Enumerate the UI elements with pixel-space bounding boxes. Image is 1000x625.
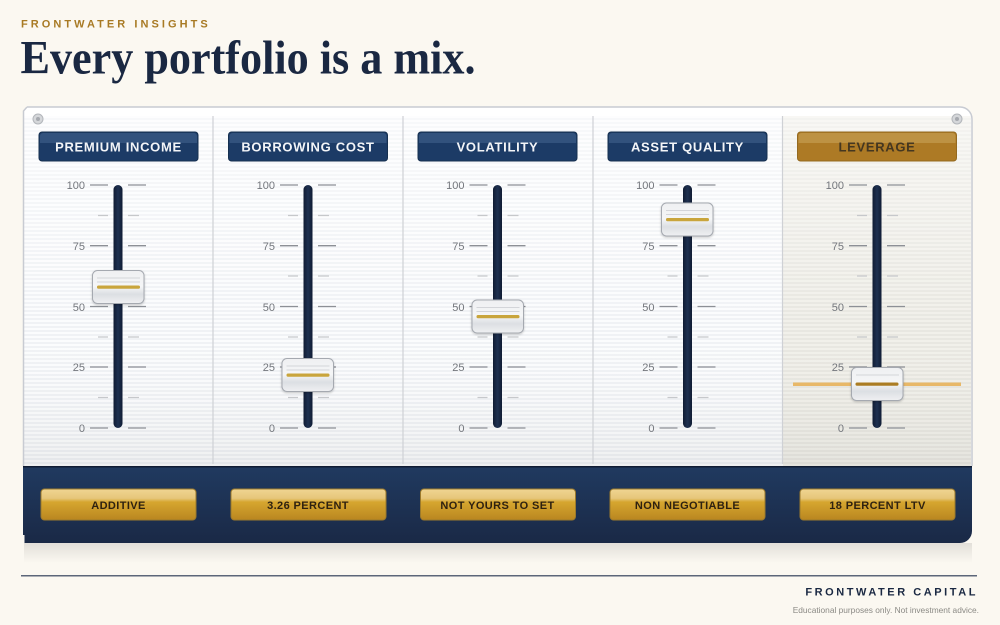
slider: volatility bbox=[446, 180, 526, 435]
button: not yours to set: NOT YOURS TO SET bbox=[440, 500, 555, 512]
slider: premium income: 50 bbox=[73, 302, 85, 314]
slider: borrowing cost bbox=[257, 180, 336, 435]
header: leverage bbox=[798, 132, 956, 161]
header: volatility bbox=[418, 132, 577, 161]
slider: leverage: 50 bbox=[832, 302, 844, 314]
slider: volatility: 50 bbox=[452, 302, 464, 314]
button: non negotiable bbox=[610, 489, 765, 520]
channel: borrowing cost bbox=[228, 132, 388, 435]
header: asset quality bbox=[608, 132, 767, 161]
slider: volatility: 0 bbox=[458, 423, 464, 435]
button: 18 percent ltv: 18 PERCENT LTV bbox=[829, 500, 926, 512]
channel: asset quality bbox=[608, 132, 767, 435]
channel: leverage bbox=[793, 132, 961, 435]
channel: volatility bbox=[418, 132, 577, 435]
button: 18 percent ltv bbox=[800, 489, 955, 520]
header: asset quality: ASSET QUALITY bbox=[631, 140, 744, 154]
slider: premium income: 0 bbox=[79, 423, 85, 435]
slider: leverage: 75 bbox=[832, 241, 844, 253]
slider: asset quality: 25 bbox=[642, 362, 654, 374]
slider: premium income bbox=[67, 180, 146, 435]
slider: premium income: 75 bbox=[73, 241, 85, 253]
slider: premium income: 100 bbox=[67, 180, 85, 192]
slider: borrowing cost: 50 bbox=[263, 302, 275, 314]
panel: mixing console bbox=[23, 107, 972, 563]
screw right bbox=[952, 114, 962, 124]
slider: borrowing cost: 75 bbox=[263, 241, 275, 253]
slider: asset quality: 0 bbox=[648, 423, 654, 435]
slider: volatility: 100 bbox=[446, 180, 464, 192]
bottom band bbox=[23, 466, 972, 543]
header: borrowing cost: BORROWING COST bbox=[241, 140, 375, 154]
header: volatility: VOLATILITY bbox=[457, 140, 538, 154]
limit line bbox=[793, 382, 961, 386]
disclaimer: Educational purposes only. Not investment advice. bbox=[793, 605, 979, 615]
title: Every portfolio is a mix. bbox=[20, 32, 476, 84]
channel: premium income bbox=[39, 132, 198, 435]
button: additive bbox=[41, 489, 196, 520]
footer brand: FRONTWATER CAPITAL bbox=[805, 586, 978, 598]
slider: volatility: 25 bbox=[452, 362, 464, 374]
slider: asset quality: 50 bbox=[642, 302, 654, 314]
slider: asset quality bbox=[636, 180, 716, 435]
slider: asset quality: 100 bbox=[636, 180, 654, 192]
slider: leverage: 25 bbox=[832, 362, 844, 374]
footer rule bbox=[21, 575, 977, 576]
button: non negotiable: NON NEGOTIABLE bbox=[635, 500, 740, 512]
slider: borrowing cost: 100 bbox=[257, 180, 275, 192]
slider: asset quality: 75 bbox=[642, 241, 654, 253]
slider: leverage: 100 bbox=[826, 180, 844, 192]
screw left bbox=[33, 114, 43, 124]
header: borrowing cost bbox=[228, 132, 388, 161]
eyebrow: FRONTWATER INSIGHTS bbox=[21, 18, 211, 30]
header: leverage: LEVERAGE bbox=[838, 140, 916, 154]
header: premium income: PREMIUM INCOME bbox=[55, 140, 182, 154]
slider: volatility: 75 bbox=[452, 241, 464, 253]
button: additive: ADDITIVE bbox=[91, 500, 146, 512]
button: 3.26 percent: 3.26 PERCENT bbox=[267, 500, 349, 512]
slider: leverage: 0 bbox=[838, 423, 844, 435]
slider: borrowing cost: 25 bbox=[263, 362, 275, 374]
slider: borrowing cost: 0 bbox=[269, 423, 275, 435]
button: not yours to set bbox=[420, 489, 576, 520]
button: 3.26 percent bbox=[231, 489, 386, 520]
slider: leverage bbox=[793, 180, 961, 435]
header: premium income bbox=[39, 132, 198, 161]
slider: premium income: 25 bbox=[73, 362, 85, 374]
